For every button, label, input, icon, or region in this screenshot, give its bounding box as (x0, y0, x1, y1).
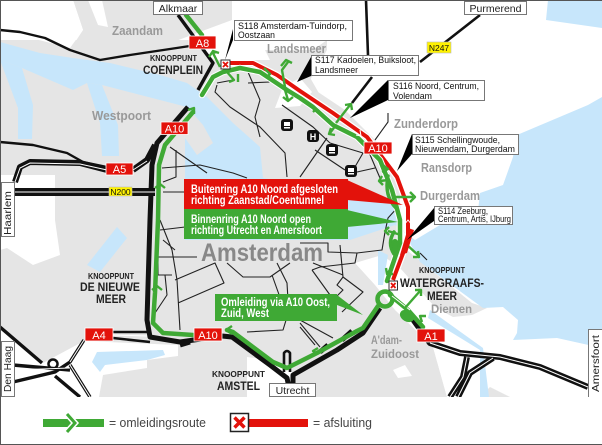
callout: S116: S116 Noord, Centrum, (393, 81, 479, 92)
icon: bus (326, 144, 338, 156)
place names: Ransdorp (421, 160, 472, 175)
callout: S117 (312, 55, 418, 76)
junction labels: WATERGRAAFS- (400, 276, 484, 290)
place names: A'dam- (371, 335, 402, 347)
place names: Landsmeer (267, 41, 326, 56)
junction labels: KNOOPPUNT (150, 53, 198, 63)
panel: closure notice (184, 179, 348, 209)
icon: bus (281, 119, 293, 131)
junction labels: COENPLEIN (143, 63, 203, 77)
road shields: N200 (110, 187, 131, 197)
place names: Durgerdam (420, 188, 480, 203)
icon: helicopter: H (310, 132, 316, 142)
junction labels: KNOOPPUNT (88, 271, 135, 281)
destination: Utrecht (270, 384, 316, 397)
white land patches (0, 0, 482, 397)
panel: diversion notice: Zuid, West (221, 308, 269, 320)
junction labels: MEER (427, 289, 457, 303)
callout: S114: Centrum, Artis, IJburg (438, 214, 511, 225)
callout: S115 (412, 134, 518, 155)
destination: Den Haag: Den Haag (2, 346, 14, 392)
local street network (155, 72, 427, 347)
road shields: N247 (429, 43, 449, 53)
junction labels: DE NIEUWE (80, 280, 140, 294)
place names: Zuidoost (371, 349, 419, 361)
place names: Amsterdam (201, 239, 323, 267)
callout: S117: Landsmeer (315, 65, 358, 76)
callout pointers (225, 29, 434, 240)
junction labels: AMSTEL (217, 379, 260, 393)
destination: Purmerend: Purmerend (470, 3, 522, 15)
place names: Zaandam (112, 23, 163, 38)
closed road: white chevrons on red (356, 130, 412, 225)
green wedge pointer (347, 210, 398, 227)
icon: bus (345, 165, 357, 177)
panel: diversion notice (215, 294, 363, 321)
destination: Amersfoort (588, 330, 602, 398)
closed road: red line A10 Noord (230, 63, 408, 280)
legend background (0, 397, 602, 443)
legend: closure: = afsluiting (313, 415, 372, 430)
road shields (85, 36, 451, 343)
panel: open route notice (184, 209, 348, 239)
callout: S115: Nieuwendam, Durgerdam (415, 144, 515, 155)
place names: Zunderdorp (394, 116, 458, 131)
place names (92, 23, 480, 361)
red wedge pointer (347, 180, 403, 205)
panel: diversion notice: Omleiding via A10 Oost, (221, 297, 330, 309)
map base: urban land (0, 0, 510, 397)
white centre line on diversion branch (392, 296, 410, 310)
destination: Utrecht: Utrecht (276, 385, 310, 397)
junction labels (80, 53, 484, 393)
legend: diversion route (43, 414, 206, 432)
junction labels: MEER (96, 292, 126, 306)
road shields: A4 (92, 330, 106, 342)
panel: open route notice: Binnenring A10 Noord open (191, 214, 311, 226)
destination: Haarlem: Haarlem (2, 191, 14, 235)
destination: Alkmaar: Alkmaar (159, 3, 198, 15)
panel: open route notice: richting Utrecht en Amersfoort (191, 225, 322, 237)
panel: closure notice: richting Zaanstad/Coentunnel (191, 195, 324, 207)
legend: closure (230, 414, 372, 432)
callout: S114: S114 Zeeburg, (438, 206, 488, 217)
place names: Diemen (431, 304, 472, 316)
callout: S118: S118 Amsterdam-Tuindorp, (238, 21, 347, 32)
junction labels: KNOOPPUNT (212, 369, 266, 379)
callout: S118: Oostzaan (238, 30, 275, 41)
callout: S116 (388, 80, 484, 102)
road shields: A10 (165, 124, 184, 136)
destination: Amersfoort: Amersfoort (590, 335, 602, 392)
destination: Alkmaar (154, 2, 202, 15)
callout: S116: Volendam (393, 91, 432, 102)
road shields: A1 (424, 331, 438, 343)
panel: closure notice: Buitenring A10 Noord afgesloten (191, 184, 338, 196)
junction labels: KNOOPPUNT (419, 265, 466, 275)
callout: S117: S117 Kadoelen, Buiksloot, (315, 55, 416, 66)
diversion route: green ring (153, 15, 423, 368)
closure marker: Watergraafsmeer (389, 281, 398, 290)
callout: S114 (434, 206, 512, 225)
road shields: A5 (113, 164, 126, 176)
destination: Haarlem (2, 182, 14, 236)
diversion exit arrows (152, 51, 426, 354)
place names: Westpoort (92, 108, 152, 123)
closure marker: Coenplein (221, 60, 230, 69)
road shields: A10 (368, 143, 388, 155)
callout: S118 (234, 20, 352, 41)
road shields: A10 (198, 330, 218, 342)
legend: diversion route: = omleidingsroute (109, 415, 206, 430)
callout: S115: S115 Schellingwoude, (415, 135, 500, 146)
icon: helicopter (307, 130, 319, 142)
road shields: A8 (196, 38, 209, 50)
